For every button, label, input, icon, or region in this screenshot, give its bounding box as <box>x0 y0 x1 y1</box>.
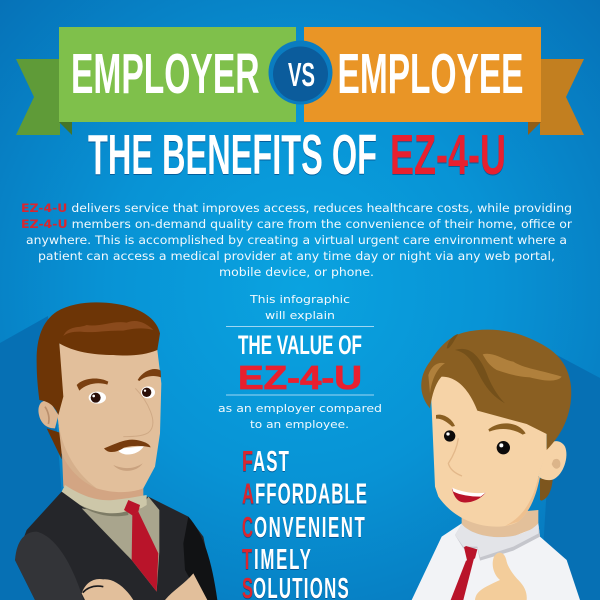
facts acronym list: F <box>242 446 253 478</box>
facts acronym list <box>242 446 367 600</box>
character: employer <box>15 302 217 600</box>
ribbon tail: left <box>16 59 72 135</box>
callout closing <box>218 402 382 431</box>
callout lead-in <box>249 293 350 322</box>
vs badge <box>268 40 332 104</box>
callout lead-in: will explain <box>265 309 335 322</box>
ribbon tail: right <box>528 59 584 135</box>
callout heading: EZ-4-U <box>238 359 362 396</box>
intro paragraph: patient can access a medical provider at any time day or night via any web portal, <box>38 249 555 263</box>
facts acronym list: T <box>242 544 252 576</box>
panel: employer <box>59 27 296 122</box>
intro paragraph: mobile device, or phone. <box>219 265 374 279</box>
panel: employee <box>304 27 541 122</box>
facts acronym list: AST <box>253 447 289 478</box>
callout heading: THE VALUE OF <box>238 330 362 360</box>
facts acronym list: IMELY <box>254 545 311 576</box>
intro paragraph <box>21 201 572 279</box>
intro paragraph: EZ-4-U delivers service that improves access, reduces healthcare costs, while providing <box>21 201 572 215</box>
man shadow: left <box>0 316 70 600</box>
facts acronym list: A <box>242 478 254 510</box>
value callout <box>218 293 382 431</box>
title: THE BENEFITS OF <box>88 123 377 187</box>
vs badge: VS <box>288 56 315 93</box>
header banner <box>16 27 584 135</box>
character: employee <box>412 330 580 600</box>
title: EZ-4-U <box>390 123 506 187</box>
facts acronym list: C <box>242 512 253 544</box>
facts acronym list: FFORDABLE <box>255 479 367 511</box>
panel: employer: EMPLOYER <box>71 42 260 106</box>
facts acronym list: ONVENIENT <box>254 513 365 544</box>
callout lead-in: This infographic <box>249 293 350 306</box>
callout closing: as an employer compared <box>218 402 382 415</box>
intro paragraph: anywhere. This is accomplished by creating a virtual urgent care environment where a <box>26 233 567 247</box>
intro paragraph: EZ-4-U members on-demand quality care from the convenience of their home, office or <box>21 217 572 231</box>
man shadow: right <box>540 354 600 600</box>
callout heading <box>238 330 362 396</box>
callout closing: to an employee. <box>250 418 349 431</box>
